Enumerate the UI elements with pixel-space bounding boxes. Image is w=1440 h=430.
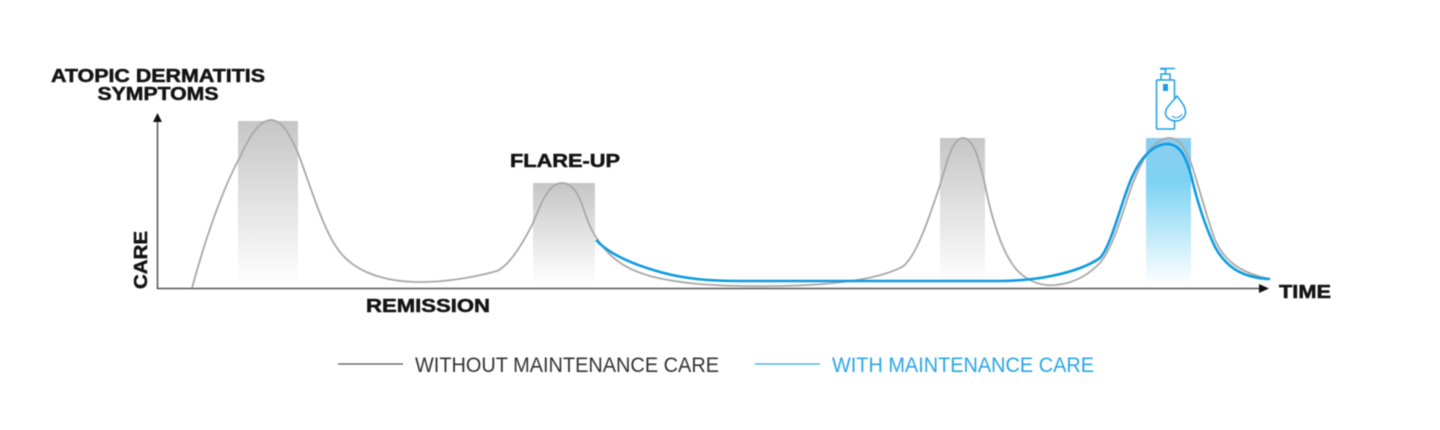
y-axis title: ATOPIC DERMATITIS: [51, 66, 265, 86]
flare-up band 1: [238, 121, 298, 284]
legend: without maintenance care: WITHOUT MAINTENANCE CARE: [415, 354, 719, 377]
flare-up band 3: [940, 138, 985, 284]
flare-up label: FLARE-UP: [510, 151, 620, 171]
y-axis title: SYMPTOMS: [98, 84, 218, 104]
curve: without maintenance care: [192, 120, 1270, 288]
time label: TIME: [1279, 282, 1331, 302]
icon: lotion bottle with drop: [1156, 68, 1186, 129]
flare-up band 2: [533, 183, 595, 284]
care label: CARE: [131, 231, 151, 289]
flare-up band 4 with care: [1146, 138, 1191, 284]
curve: with maintenance care: [596, 144, 1270, 281]
axes: [153, 113, 1269, 293]
remission label: REMISSION: [366, 296, 490, 316]
y-axis title: [51, 66, 265, 104]
legend: with maintenance care: WITH MAINTENANCE CARE: [832, 354, 1094, 377]
